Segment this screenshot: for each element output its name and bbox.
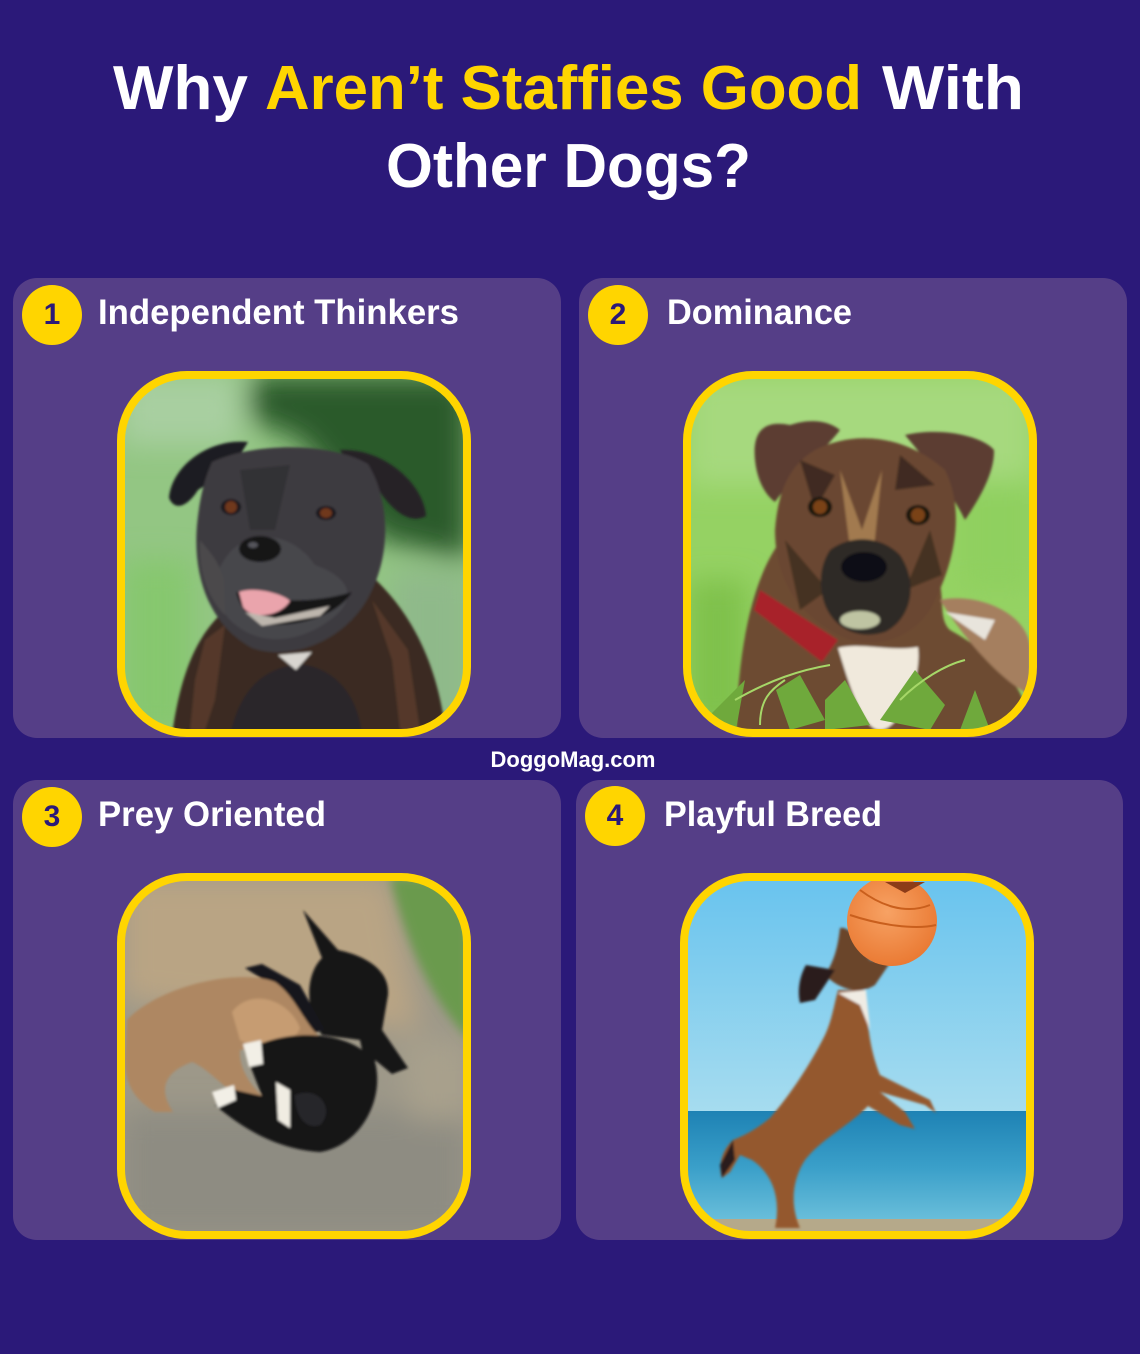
heading 1: Independent Thinkers bbox=[98, 293, 459, 332]
photo 3: puppies play-fighting bbox=[121, 877, 470, 1235]
heading 2: Dominance bbox=[667, 293, 852, 332]
photo 4: dog jumping for a ball at the beach bbox=[684, 876, 1030, 1237]
panel 2: Dominance bbox=[579, 278, 1127, 738]
number badge 2: 2 bbox=[610, 298, 626, 331]
photo frame 2 bbox=[687, 375, 1033, 733]
panel 1: Independent Thinkers bbox=[13, 278, 561, 738]
panel 3: Prey Oriented bbox=[13, 780, 561, 1240]
source credit: DoggoMag.com bbox=[490, 747, 656, 772]
title: Why bbox=[113, 54, 249, 123]
number badge 4 bbox=[585, 786, 645, 846]
photo frame 4 bbox=[684, 877, 1030, 1235]
title: With bbox=[882, 54, 1024, 123]
title: Aren’t Staffies Good bbox=[265, 54, 862, 123]
photo 2: brindle staffie with red collar bbox=[687, 375, 1035, 735]
photo 1: black staffie portrait bbox=[121, 375, 470, 735]
title: Other Dogs? bbox=[386, 132, 751, 201]
heading 4: Playful Breed bbox=[664, 795, 882, 834]
panel 4: Playful Breed bbox=[576, 780, 1123, 1240]
number badge 1: 1 bbox=[44, 298, 60, 331]
number badge 2 bbox=[588, 285, 648, 345]
number badge 1 bbox=[22, 285, 82, 345]
number badge 3 bbox=[22, 787, 82, 847]
heading 3: Prey Oriented bbox=[98, 795, 326, 834]
title bbox=[113, 54, 1024, 201]
photo frame 3 bbox=[121, 877, 467, 1235]
number badge 3: 3 bbox=[44, 800, 60, 833]
photo frame 1 bbox=[121, 375, 467, 733]
number badge 4: 4 bbox=[607, 799, 624, 832]
